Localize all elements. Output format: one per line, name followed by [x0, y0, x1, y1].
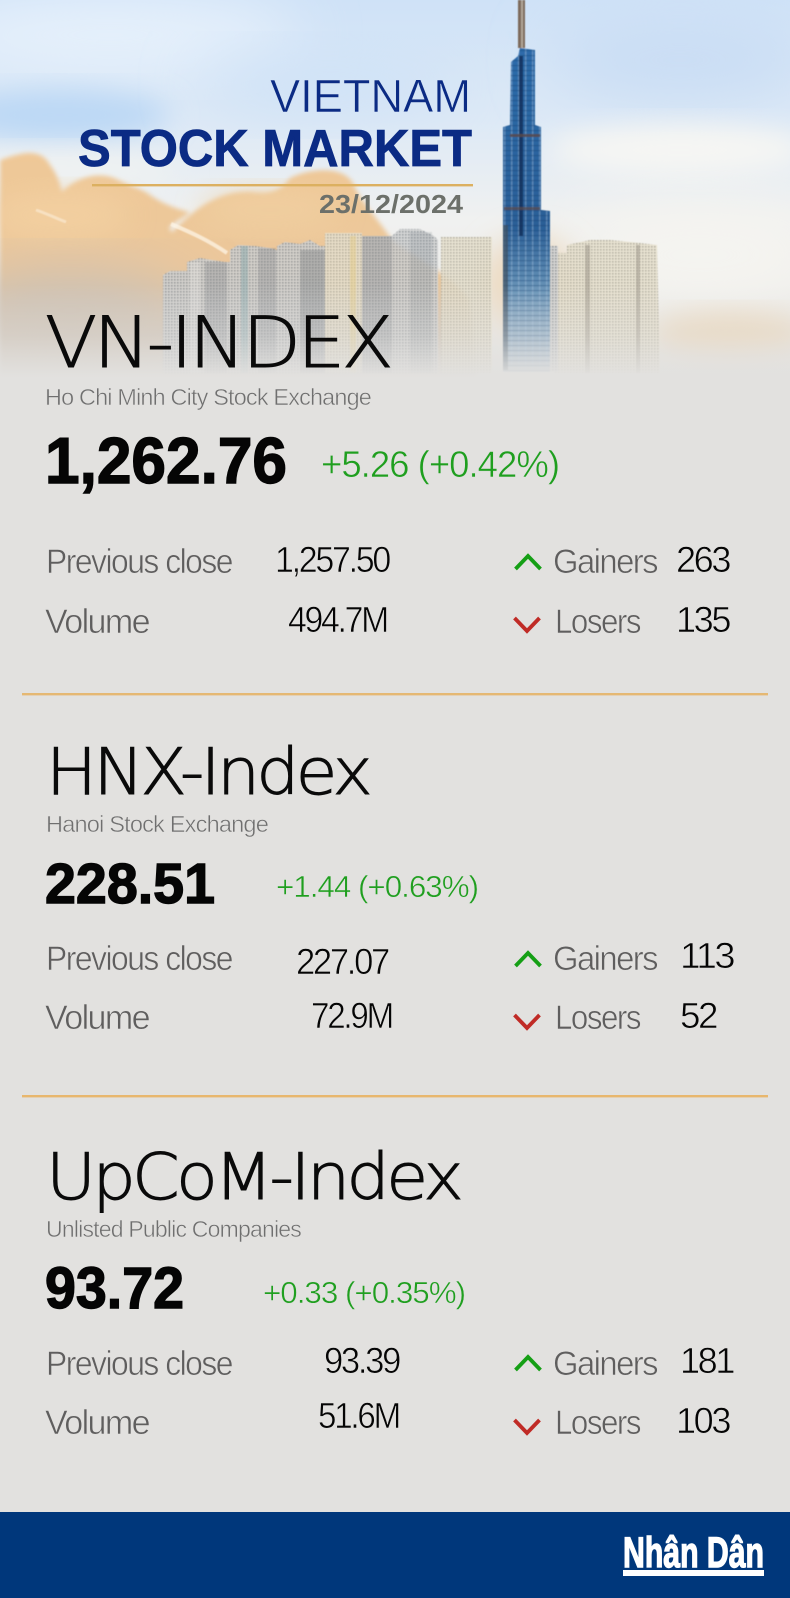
volume: 51.6M [318, 1395, 399, 1436]
fade into page [0, 285, 790, 378]
index value: 1,262.76 [45, 424, 287, 497]
title line: STOCK MARKET: STOCK MARKET [78, 120, 472, 178]
title line: VIETNAM: VIETNAM [270, 70, 471, 122]
title rule [92, 184, 473, 186]
volume [45, 599, 387, 641]
losers [514, 995, 717, 1037]
gainers [516, 1340, 734, 1383]
gainers: 263 [676, 539, 730, 580]
previous close: 227.07 [296, 941, 389, 982]
gainers: Gainers [553, 543, 658, 581]
change: +1.44 (+0.63%) [276, 869, 478, 904]
losers: Losers [555, 999, 641, 1037]
previous close: Previous close [46, 940, 233, 978]
previous close [46, 1340, 400, 1383]
volume: 494.7M [288, 599, 387, 640]
gainers: 181 [680, 1340, 734, 1381]
exchange name: Hanoi Stock Exchange [46, 811, 268, 837]
change: +5.26 (+0.42%) [321, 444, 559, 485]
volume: Volume [45, 999, 150, 1037]
losers: Losers [555, 603, 641, 641]
title [78, 70, 473, 219]
previous close [46, 539, 390, 581]
exchange name: Unlisted Public Companies [46, 1216, 301, 1242]
change: +0.33 (+0.35%) [263, 1275, 465, 1310]
previous close: 93.39 [324, 1340, 400, 1381]
previous close [46, 940, 389, 982]
losers: 135 [676, 599, 730, 640]
losers: 103 [676, 1400, 730, 1441]
volume: Volume [45, 1404, 150, 1442]
losers [514, 599, 730, 641]
footer band [0, 1512, 790, 1598]
gainers: Gainers [553, 1345, 658, 1383]
hero image: sky and skyline [0, 0, 790, 371]
date: 23/12/2024 [319, 189, 464, 219]
panel: HNX-Index [45, 736, 734, 1037]
orange clouds [0, 150, 457, 364]
index value: 228.51 [45, 852, 215, 916]
losers [514, 1400, 730, 1442]
heading: HNX-Index: HNX-Index [46, 736, 370, 810]
volume: Volume [45, 603, 150, 641]
heading: VN-INDEX: VN-INDEX [45, 302, 391, 384]
gainers [516, 539, 730, 581]
gainers [516, 935, 734, 978]
residential towers right [550, 240, 660, 373]
index value: 93.72 [45, 1256, 184, 1321]
panel: UpCoM-Index [45, 1141, 734, 1442]
panel: VN-INDEX [45, 302, 730, 641]
gainers: 113 [680, 935, 734, 976]
losers: 52 [680, 995, 717, 1036]
volume: 72.9M [311, 995, 392, 1036]
Landmark tower [503, 0, 550, 372]
volume [45, 995, 392, 1037]
previous close: Previous close [46, 1345, 233, 1383]
heading: UpCoM-Index: UpCoM-Index [46, 1141, 461, 1215]
gainers: Gainers [553, 940, 658, 978]
residential towers left [163, 229, 492, 373]
previous close: Previous close [46, 543, 233, 581]
volume [45, 1395, 399, 1442]
losers: Losers [555, 1404, 641, 1442]
previous close: 1,257.50 [275, 539, 390, 580]
exchange name: Ho Chi Minh City Stock Exchange [45, 384, 371, 410]
